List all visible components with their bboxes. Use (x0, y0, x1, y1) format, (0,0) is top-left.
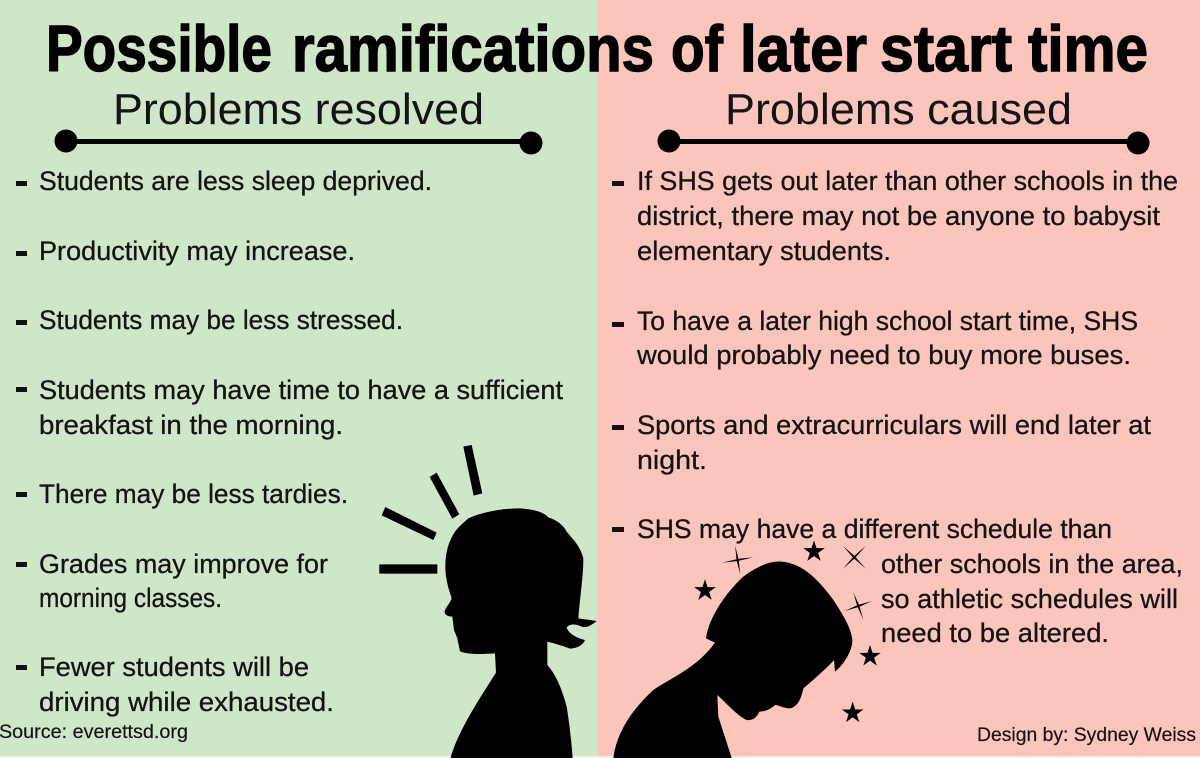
bullet: buses (612, 306, 1138, 370)
panel: pink background (597, 0, 1200, 756)
bullet: sports (612, 410, 1152, 475)
divider with end dots (54, 130, 542, 154)
bullet: sports: Sports and extracurriculars will end later at (637, 410, 1152, 440)
bullet: breakfast: Students may have time to have a sufficient (39, 375, 564, 405)
design credit: Design by: Sydney Weiss (977, 724, 1196, 746)
title: ramifications (292, 12, 654, 85)
title: later (740, 12, 867, 85)
bullet: breakfast (16, 375, 564, 440)
heading: problems resolved: Problems resolved (113, 86, 484, 134)
bullet: grades: Grades may improve for (39, 549, 328, 579)
icon: alert girl silhouette with rays (379, 445, 597, 758)
bullet: grades (16, 549, 328, 613)
heading: problems caused: Problems caused (725, 86, 1072, 134)
bullet: tardies: There may be less tardies. (39, 479, 348, 509)
bullet: grades: morning classes. (39, 583, 222, 613)
bullet: athletic schedules: SHS may have a different schedule than (637, 514, 1112, 544)
bullet: athletic schedules (612, 514, 1183, 648)
title: time (1028, 12, 1148, 85)
bullet: babysitting: district, there may not be anyone to babysit (637, 201, 1161, 231)
bullet: driving (16, 652, 334, 717)
title: Possible (46, 12, 272, 85)
panel: problems resolved (16, 86, 564, 717)
bullet: sports: night. (637, 445, 707, 475)
bullet: driving: driving while exhausted. (39, 687, 334, 717)
bullet: babysitting: If SHS gets out later than other schools in the (637, 166, 1178, 196)
bullet: stress: Students may be less stressed. (39, 305, 403, 335)
panel: problems caused (612, 86, 1183, 648)
bullet: athletic schedules: so athletic schedules will (881, 584, 1178, 614)
panel: green background (0, 0, 597, 756)
bullet: buses: To have a later high school start time, SHS (637, 306, 1138, 336)
title (46, 12, 1148, 85)
divider with end dots (658, 130, 1150, 154)
bullet: buses: would probably need to buy more buses. (636, 340, 1131, 370)
bullet: babysitting: elementary students. (637, 236, 891, 266)
icon: dizzy boy silhouette with stars (613, 535, 881, 758)
bullet: athletic schedules: need to be altered. (881, 618, 1109, 648)
title: of (671, 12, 723, 85)
bullet: sleep deprived: Students are less sleep deprived. (39, 166, 432, 196)
title: start (880, 12, 1012, 85)
bullet: breakfast: breakfast in the morning. (39, 410, 343, 440)
source credit: Source: everettsd.org (0, 721, 188, 743)
bullet: babysitting (612, 166, 1178, 266)
bullet: driving: Fewer students will be (39, 652, 309, 682)
bullet: athletic schedules: other schools in the area, (881, 549, 1183, 579)
bullet: productivity: Productivity may increase. (39, 236, 355, 266)
